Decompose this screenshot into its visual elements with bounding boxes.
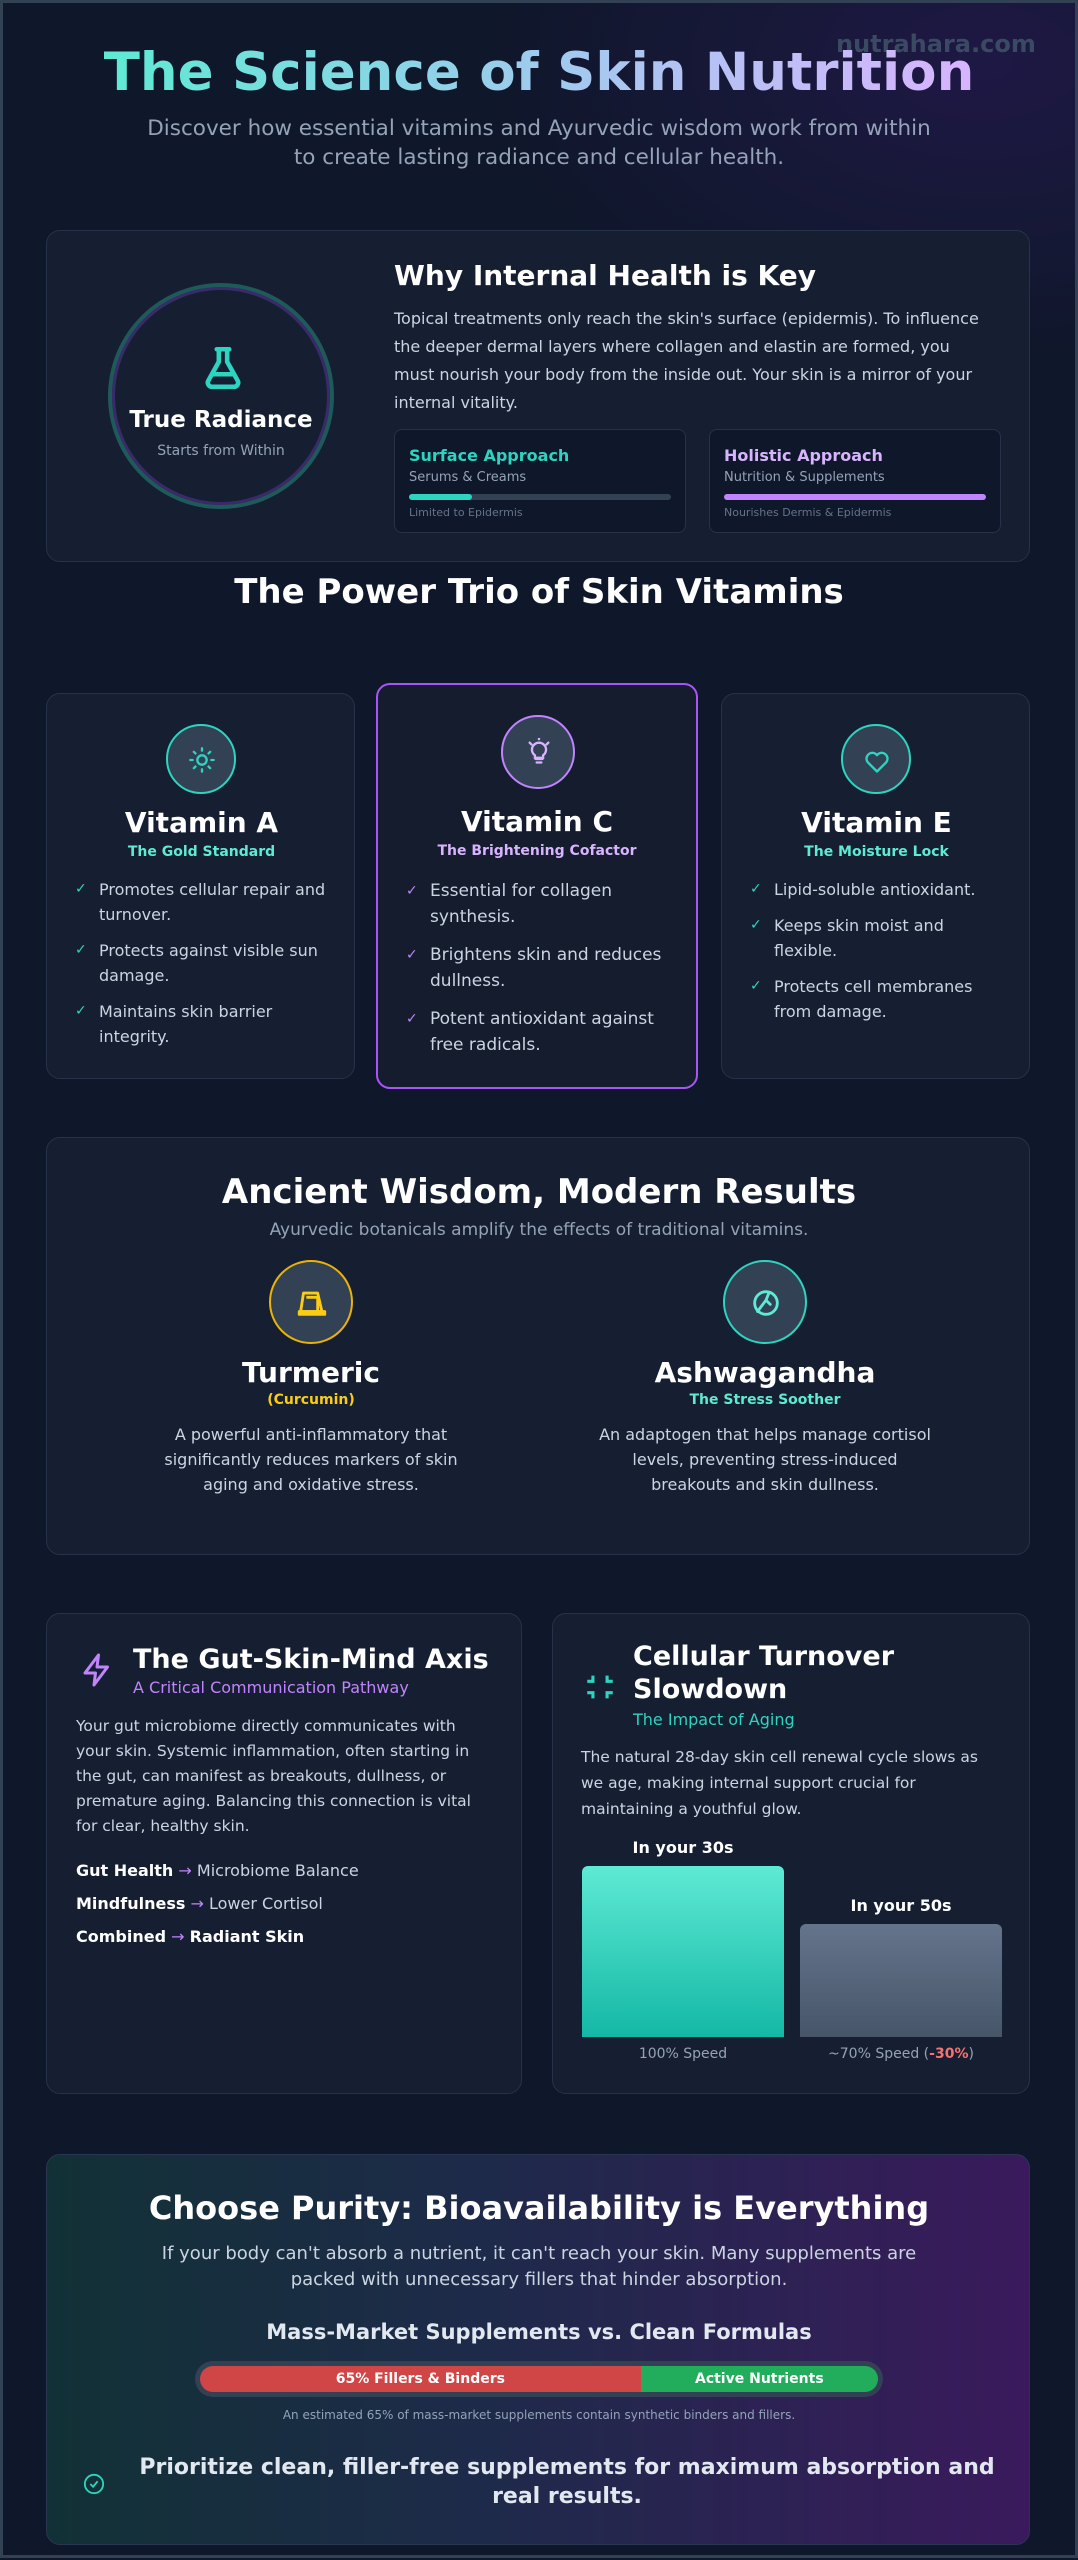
panel: choose purity: Choose Purity: Bioavailability is Everything xyxy=(149,2189,929,2227)
bullets: Maintains skin barrier integrity. xyxy=(99,1002,272,1046)
bullets: ✓ xyxy=(75,1003,87,1019)
stacked bar xyxy=(195,2361,883,2397)
stacked bar: Active Nutrients xyxy=(695,2371,824,2387)
card: vitamin E: Vitamin E xyxy=(801,806,952,839)
bullets: ✓ xyxy=(406,1011,418,1027)
box: surface: Surface Approach xyxy=(409,446,569,465)
panel: cellular turnover: The natural 28-day skin cell renewal cycle slows as we age, making internal support crucial for maintaining a youthful glow. xyxy=(581,1748,978,1818)
bullets: ✓ xyxy=(750,917,762,933)
panel: cellular turnover: The Impact of Aging xyxy=(633,1710,795,1729)
subtitle: to create lasting radiance and cellular health. xyxy=(294,145,784,170)
panel: gut-skin-mind: A Critical Communication Pathway xyxy=(133,1678,409,1697)
panel: why internal health xyxy=(46,230,1030,562)
bullets: Protects cell membranes from damage. xyxy=(774,977,972,1021)
ashwagandha: Ashwagandha xyxy=(655,1356,875,1389)
bullets: ✓ xyxy=(750,978,762,994)
box: holistic: Holistic Approach xyxy=(724,446,883,465)
bullets: Protects against visible sun damage. xyxy=(99,941,318,985)
card: vitamin C: Vitamin C xyxy=(461,805,613,838)
bullets: Lipid-soluble antioxidant. xyxy=(774,880,975,899)
icon: bulb xyxy=(501,715,575,789)
panel: gut-skin-mind: The Gut-Skin-Mind Axis xyxy=(133,1644,489,1675)
bar chart: 100% Speed xyxy=(639,2046,727,2062)
subtitle xyxy=(147,116,931,170)
panel: cellular turnover xyxy=(552,1613,1030,2094)
box: holistic xyxy=(709,429,1001,533)
list: Mindfulness → Lower Cortisol xyxy=(76,1894,323,1913)
bullets xyxy=(406,881,661,1055)
bullets xyxy=(750,880,975,1021)
heading: Why Internal Health is Key xyxy=(394,259,816,292)
icon: ashwagandha xyxy=(723,1260,807,1344)
radiance circle: True Radiance xyxy=(129,407,313,433)
panel: gut-skin-mind xyxy=(46,1613,522,2094)
turmeric: A powerful anti-inflammatory that significantly reduces markers of skin aging and oxidative stress. xyxy=(164,1425,458,1494)
panel: choose purity: An estimated 65% of mass-market supplements contain synthetic binders and fillers. xyxy=(283,2408,795,2422)
box: surface xyxy=(394,429,686,533)
radiance circle xyxy=(108,283,334,509)
box: holistic: Nourishes Dermis & Epidermis xyxy=(724,506,891,519)
stacked bar: 65% Fillers & Binders xyxy=(336,2371,505,2387)
radiance circle: Starts from Within xyxy=(157,443,285,459)
turmeric: (Curcumin) xyxy=(267,1392,355,1408)
bullets: Keeps skin moist and flexible. xyxy=(774,916,944,960)
panel: ancient wisdom xyxy=(46,1137,1030,1555)
icon: flask xyxy=(206,347,240,390)
ashwagandha: An adaptogen that helps manage cortisol levels, preventing stress-induced breakouts and skin dullness. xyxy=(599,1425,931,1494)
ashwagandha xyxy=(599,1260,931,1494)
box: holistic: Nutrition & Supplements xyxy=(724,470,885,485)
bullets: ✓ xyxy=(750,881,762,897)
bullets: ✓ xyxy=(75,881,87,897)
bar chart: In your 30s xyxy=(632,1838,733,1857)
bullets: ✓ xyxy=(75,942,87,958)
panel: choose purity: If your body can't absorb a nutrient, it can't reach your skin. Many supplements are xyxy=(162,2243,916,2264)
icon: sun xyxy=(166,724,236,794)
card: vitamin A: Vitamin A xyxy=(125,806,278,839)
paragraph: Topical treatments only reach the skin's surface (epidermis). To influence the deeper dermal layers where collagen and elastin are formed, you must nourish your body from the inside out. Your skin is a mirror of your internal vitality. xyxy=(394,309,979,412)
turmeric: Turmeric xyxy=(242,1356,380,1389)
bar chart: ~70% Speed (-30%) xyxy=(828,2046,974,2062)
bar chart xyxy=(582,1838,1002,2062)
list xyxy=(76,1861,359,1946)
panel: cellular turnover: Slowdown xyxy=(633,1674,787,1705)
list: Combined → Radiant Skin xyxy=(76,1927,304,1946)
bullets: ✓ xyxy=(406,883,418,899)
list: Gut Health → Microbiome Balance xyxy=(76,1861,359,1880)
icon: heart xyxy=(841,724,911,794)
panel: ancient wisdom: Ayurvedic botanicals amplify the effects of traditional vitamins. xyxy=(270,1220,808,1240)
heading: power trio: The Power Trio of Skin Vitamins xyxy=(234,572,844,612)
card: vitamin E xyxy=(721,693,1030,1079)
card: vitamin C xyxy=(376,683,698,1089)
icon: shrink xyxy=(587,1676,613,1698)
bullets: Promotes cellular repair and turnover. xyxy=(99,880,325,924)
icon: bolt xyxy=(83,1654,110,1686)
bullets: Brightens skin and reduces dullness. xyxy=(430,945,661,991)
callout: Prioritize clean, filler-free supplements for maximum absorption and real results. xyxy=(139,2455,995,2509)
bar chart: In your 50s xyxy=(850,1896,951,1915)
icon: check circle xyxy=(84,2474,104,2494)
panel: choose purity: Mass-Market Supplements vs. Clean Formulas xyxy=(266,2320,812,2344)
watermark: nutrahara.com xyxy=(836,30,1036,58)
bullets: Potent antioxidant against free radicals. xyxy=(430,1009,654,1055)
bullets: ✓ xyxy=(406,947,418,963)
title: The Science of Skin Nutrition xyxy=(104,42,974,103)
panel: cellular turnover: Cellular Turnover xyxy=(633,1641,894,1672)
panel: choose purity xyxy=(46,2154,1030,2545)
bullets xyxy=(75,880,325,1046)
card: vitamin E: The Moisture Lock xyxy=(804,844,949,860)
panel: choose purity: packed with unnecessary fillers that hinder absorption. xyxy=(291,2269,787,2290)
ashwagandha: The Stress Soother xyxy=(690,1392,840,1408)
card: vitamin A xyxy=(46,693,355,1079)
subtitle: Discover how essential vitamins and Ayurvedic wisdom work from within xyxy=(147,116,931,141)
turmeric xyxy=(164,1260,458,1494)
bullets: Essential for collagen synthesis. xyxy=(430,881,612,927)
icon: turmeric xyxy=(269,1260,353,1344)
box: surface: Limited to Epidermis xyxy=(409,506,523,519)
panel: gut-skin-mind: Your gut microbiome directly communicates with your skin. Systemic inflammation, often starting in the gut, can manifest as breakouts, dullness, or premature aging. Balancing this connection is vital for clear, healthy skin. xyxy=(76,1717,471,1835)
card: vitamin A: The Gold Standard xyxy=(128,844,275,860)
card: vitamin C: The Brightening Cofactor xyxy=(437,843,636,859)
box: surface: Serums & Creams xyxy=(409,470,526,485)
panel: ancient wisdom: Ancient Wisdom, Modern Results xyxy=(222,1172,856,1212)
